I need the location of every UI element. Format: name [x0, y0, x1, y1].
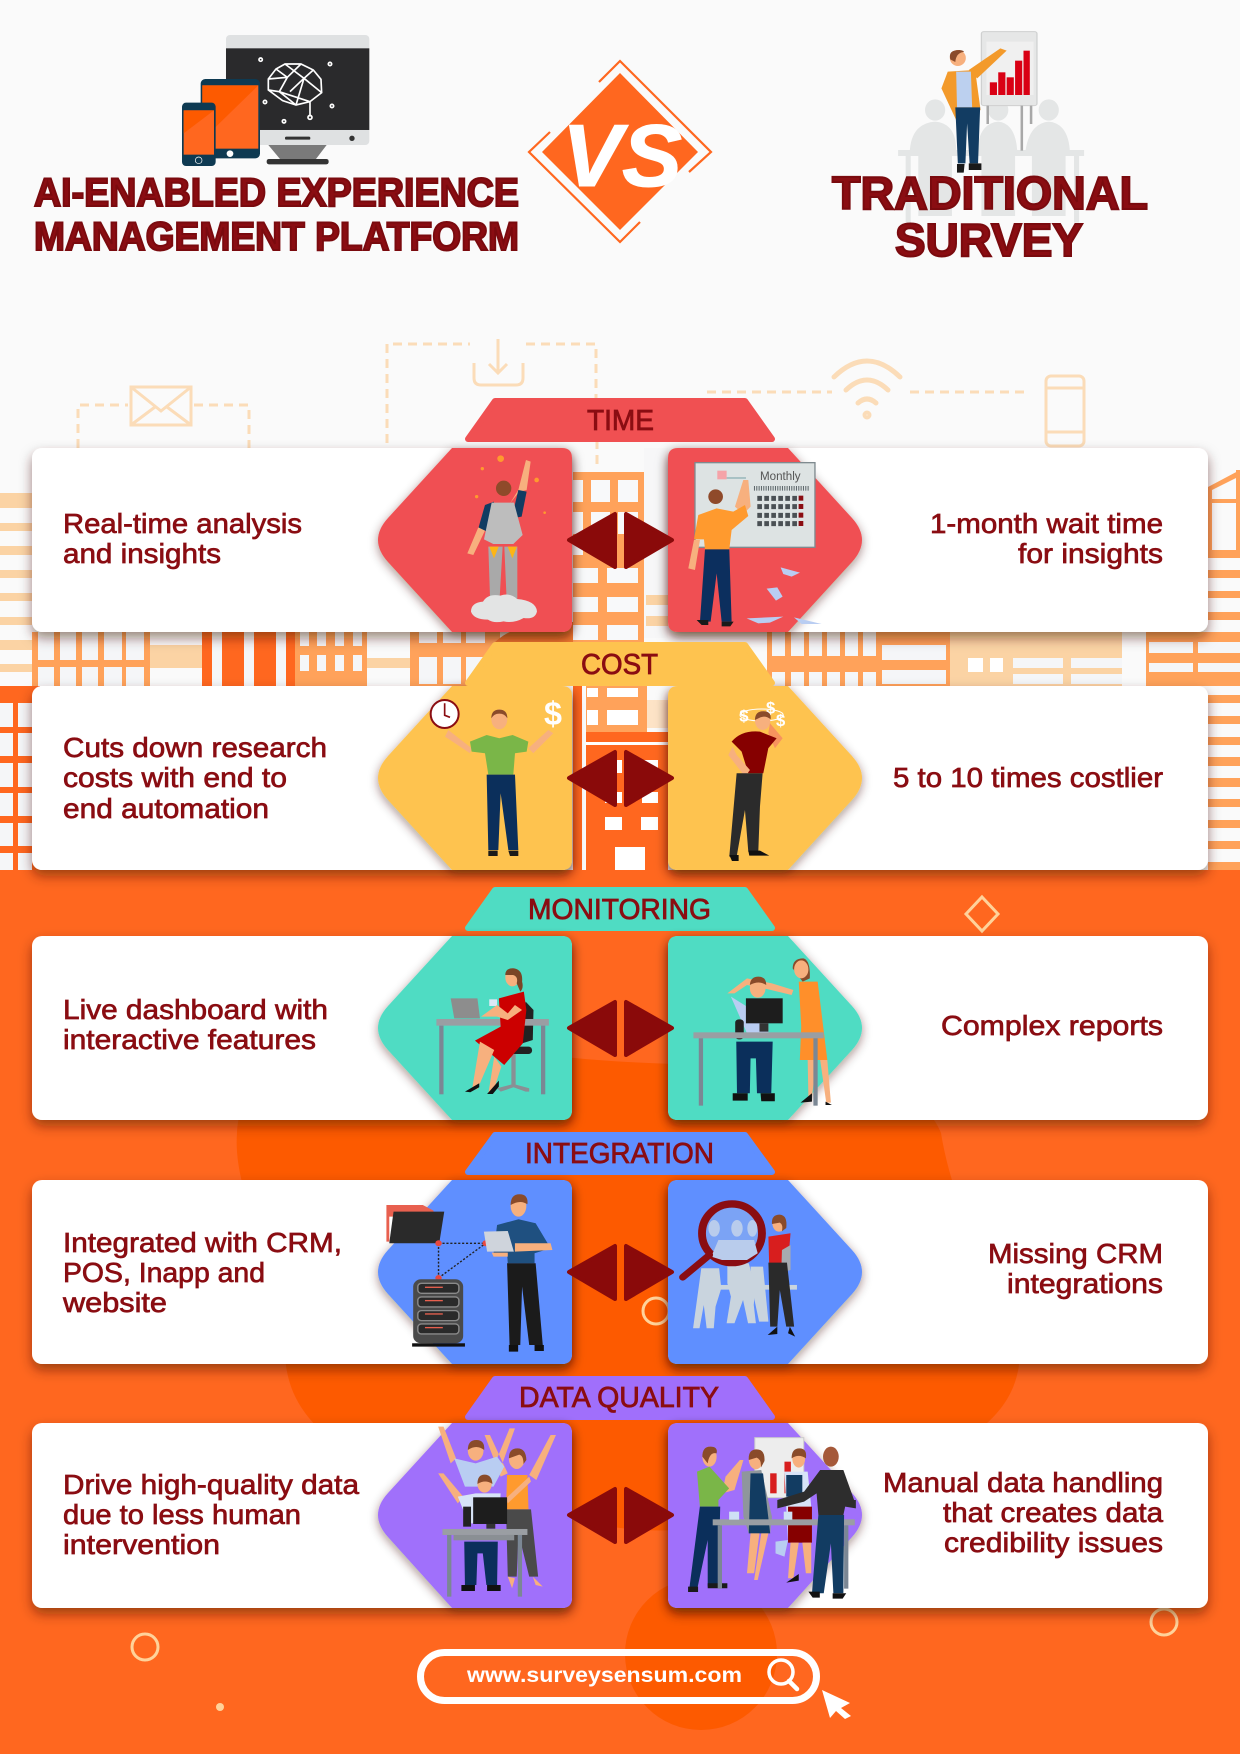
- dashed connector lines: [78, 344, 1025, 470]
- arrows: compare: [569, 1002, 672, 1055]
- icon: envelope: [131, 387, 191, 425]
- panel: AI data quality: [378, 1423, 572, 1608]
- text: real-time analysis: and insights: [63, 538, 221, 569]
- text: high-quality data: due to less human: [63, 1499, 301, 1530]
- website search bar: [420, 1652, 851, 1719]
- text: 1-month wait: for insights: [1018, 538, 1163, 569]
- text: costlier: 5 to 10 times costlier: [893, 762, 1163, 793]
- text: manual data handling: credibility issues: [944, 1527, 1163, 1558]
- panel: AI integration: [378, 1180, 572, 1364]
- title: traditional survey: TRADITIONAL: [832, 167, 1148, 219]
- panel: survey integration: [668, 1180, 862, 1364]
- tab: INTEGRATION: [468, 1135, 772, 1172]
- illustration: presenter with audience: [898, 32, 1084, 223]
- title: traditional survey: SURVEY: [895, 214, 1083, 266]
- icon: celebrating team: [438, 1427, 556, 1597]
- section: data quality: [32, 1379, 1208, 1608]
- arrows: compare: [569, 1489, 672, 1542]
- text: high-quality data: Drive high-quality data: [63, 1469, 360, 1500]
- icon: confused man with dollars: [728, 698, 786, 861]
- section: cost: [32, 645, 1208, 870]
- card: AI monitoring: [32, 936, 572, 1120]
- tab: TIME: [468, 401, 772, 439]
- text: 1-month wait: 1-month wait time: [930, 508, 1163, 539]
- tab: TIME: TIME: [587, 405, 654, 437]
- icon: stressed man with colleague: [693, 958, 832, 1106]
- card: survey integration: [668, 1180, 1208, 1364]
- text: real-time analysis: Real-time analysis: [63, 508, 302, 539]
- card: survey monitoring: [668, 936, 1208, 1120]
- tab: DATA QUALITY: [468, 1379, 772, 1417]
- icon: download tray: [474, 339, 523, 385]
- text: 1-month wait: [930, 508, 1163, 569]
- icon: team meeting at table: [688, 1438, 856, 1599]
- tab: COST: COST: [581, 649, 658, 681]
- icon: man balancing clock and money: [431, 696, 562, 856]
- section: integration: [32, 1135, 1208, 1364]
- text: live dashboard: Live dashboard with: [63, 994, 328, 1025]
- background blobs: [237, 1027, 1020, 1730]
- monitor: [226, 35, 369, 164]
- icon: confused man with dollars: $: [739, 707, 749, 726]
- icon: man at monthly calendar: [688, 463, 822, 626]
- title: traditional survey: [832, 167, 1148, 266]
- icon: phone: [1046, 376, 1084, 446]
- panel: survey monitoring: [668, 936, 862, 1120]
- brain network: [259, 58, 334, 123]
- orange lower background: [0, 870, 1240, 1754]
- icon: magnifier over people with analyst: [683, 1204, 797, 1337]
- card: AI integration: [32, 1180, 572, 1364]
- text: manual data handling: that creates data: [943, 1497, 1164, 1528]
- website search bar: www.surveysensum.com: [466, 1663, 742, 1687]
- card: survey cost: [668, 686, 1208, 870]
- icon: man balancing clock and money: $: [544, 696, 562, 733]
- text: integrated with CRM: POS, Inapp and: [63, 1257, 265, 1288]
- card: AI time: [32, 448, 572, 632]
- icon: woman at laptop: [436, 968, 549, 1094]
- tab: MONITORING: [468, 890, 772, 928]
- text: missing CRM: [988, 1238, 1163, 1299]
- text: live dashboard: interactive features: [63, 1024, 316, 1055]
- arrows: compare: [569, 514, 672, 567]
- panel: AI monitoring: [378, 936, 572, 1120]
- VS diamond badge: VS: [562, 106, 682, 205]
- text: integrated with CRM: [62, 1227, 342, 1318]
- phone: [182, 103, 216, 166]
- icon: jetpack man: [467, 455, 546, 622]
- text: complex reports: Complex reports: [941, 1010, 1163, 1041]
- text: real-time analysis: [63, 508, 302, 569]
- panel: survey time: [668, 448, 862, 632]
- VS diamond badge: [529, 61, 711, 242]
- icon: man with laptop, folder and server: [386, 1194, 552, 1352]
- text: high-quality data: intervention: [63, 1529, 220, 1560]
- tab: COST: [468, 645, 772, 683]
- tab: DATA QUALITY: DATA QUALITY: [519, 1382, 719, 1414]
- flip chart: [981, 32, 1037, 151]
- section: time: [32, 401, 1208, 632]
- text: manual data handling: Manual data handling: [883, 1467, 1163, 1498]
- background: dashed network icons: [78, 339, 1084, 470]
- panel: AI cost: [378, 686, 572, 870]
- card: AI cost: [32, 686, 572, 870]
- text: missing CRM: integrations: [1007, 1268, 1163, 1299]
- icon: wifi signal: [834, 361, 900, 417]
- text: cuts down costs: end automation: [63, 793, 269, 824]
- text: integrated with CRM: Integrated with CRM,: [63, 1227, 342, 1258]
- tab: INTEGRATION: INTEGRATION: [525, 1138, 714, 1170]
- illustration: AI devices: [182, 35, 369, 166]
- icon: magnifier: [769, 1660, 797, 1689]
- text: cuts down costs: Cuts down research: [63, 732, 327, 763]
- title: AI platform: AI-ENABLED EXPERIENCE: [34, 171, 519, 215]
- text: cuts down costs: [63, 732, 327, 824]
- text: missing CRM: Missing CRM: [988, 1238, 1163, 1269]
- panel: survey cost: [668, 686, 862, 870]
- title: AI platform: [34, 171, 519, 259]
- tab: MONITORING: MONITORING: [528, 894, 711, 926]
- audience silhouettes: [898, 99, 1084, 223]
- arrows: compare: [569, 752, 672, 805]
- presenter: [941, 48, 1007, 173]
- card: AI data quality: [32, 1423, 572, 1608]
- title: AI platform: MANAGEMENT PLATFORM: [34, 215, 519, 259]
- text: live dashboard: [63, 994, 328, 1055]
- text: integrated with CRM: website: [62, 1287, 167, 1318]
- decorative rings and dots: [132, 897, 1177, 1711]
- icon: confused man with dollars: $: [766, 698, 776, 717]
- arrows: compare: [569, 1246, 672, 1299]
- section: monitoring: [32, 890, 1208, 1120]
- panel: AI time: [378, 448, 572, 632]
- tablet: [201, 79, 260, 158]
- card: survey data quality: [668, 1423, 1208, 1608]
- icon: man at monthly calendar: Monthly: [760, 469, 801, 483]
- text: manual data handling: [883, 1467, 1164, 1558]
- panel: survey data quality: [668, 1423, 862, 1608]
- text: cuts down costs: costs with end to: [63, 762, 287, 793]
- background: city buildings: [0, 448, 1240, 870]
- text: high-quality data: [63, 1469, 360, 1560]
- card: survey time: [668, 448, 1208, 632]
- icon: confused man with dollars: $: [776, 711, 786, 730]
- icon: cursor: [822, 1690, 851, 1719]
